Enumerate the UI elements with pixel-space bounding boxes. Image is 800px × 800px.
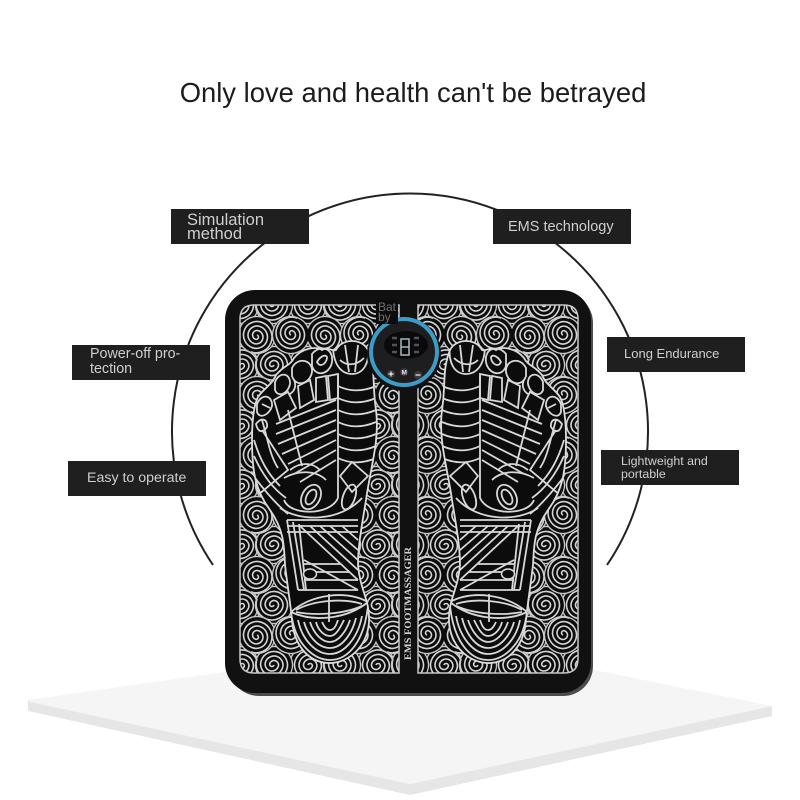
label: Long Endurance: Long Endurance — [624, 346, 719, 361]
mat body — [225, 290, 593, 696]
faint dial caption — [376, 300, 398, 324]
surrounding arc — [172, 193, 648, 565]
floor platform — [28, 670, 772, 795]
label: Lightweight and portable: portable — [621, 467, 666, 481]
label: Easy to operate — [68, 461, 206, 496]
label: Easy to operate: Easy to operate — [87, 470, 186, 486]
control dial — [367, 317, 441, 391]
label: Simulation method: Simulation — [187, 211, 264, 229]
faint dial caption: Bat — [378, 300, 397, 314]
panel: right foot pad — [418, 305, 578, 673]
digit display — [401, 339, 409, 355]
label: EMS technology — [493, 209, 631, 244]
title: Only love and health can't be betrayed — [180, 77, 646, 108]
panel: left foot pad — [240, 305, 399, 673]
label: Power-off protection — [72, 345, 210, 380]
label: Lightweight and portable — [601, 450, 739, 485]
label: Power-off protection: Power-off pro- — [90, 346, 180, 362]
buttons — [387, 370, 395, 378]
label: Power-off protection: tection — [90, 361, 132, 377]
label: Lightweight and portable: Lightweight and — [621, 454, 708, 468]
label: Simulation method: method — [187, 225, 242, 243]
faint dial caption: by — [378, 310, 391, 324]
label: Simulation method — [171, 209, 309, 244]
label: Long Endurance — [607, 337, 745, 372]
massager mat — [225, 290, 593, 696]
label: EMS technology: EMS technology — [508, 219, 614, 235]
product name: EMS FOOTMASSAGER — [403, 546, 413, 660]
control dial: M — [402, 370, 407, 376]
